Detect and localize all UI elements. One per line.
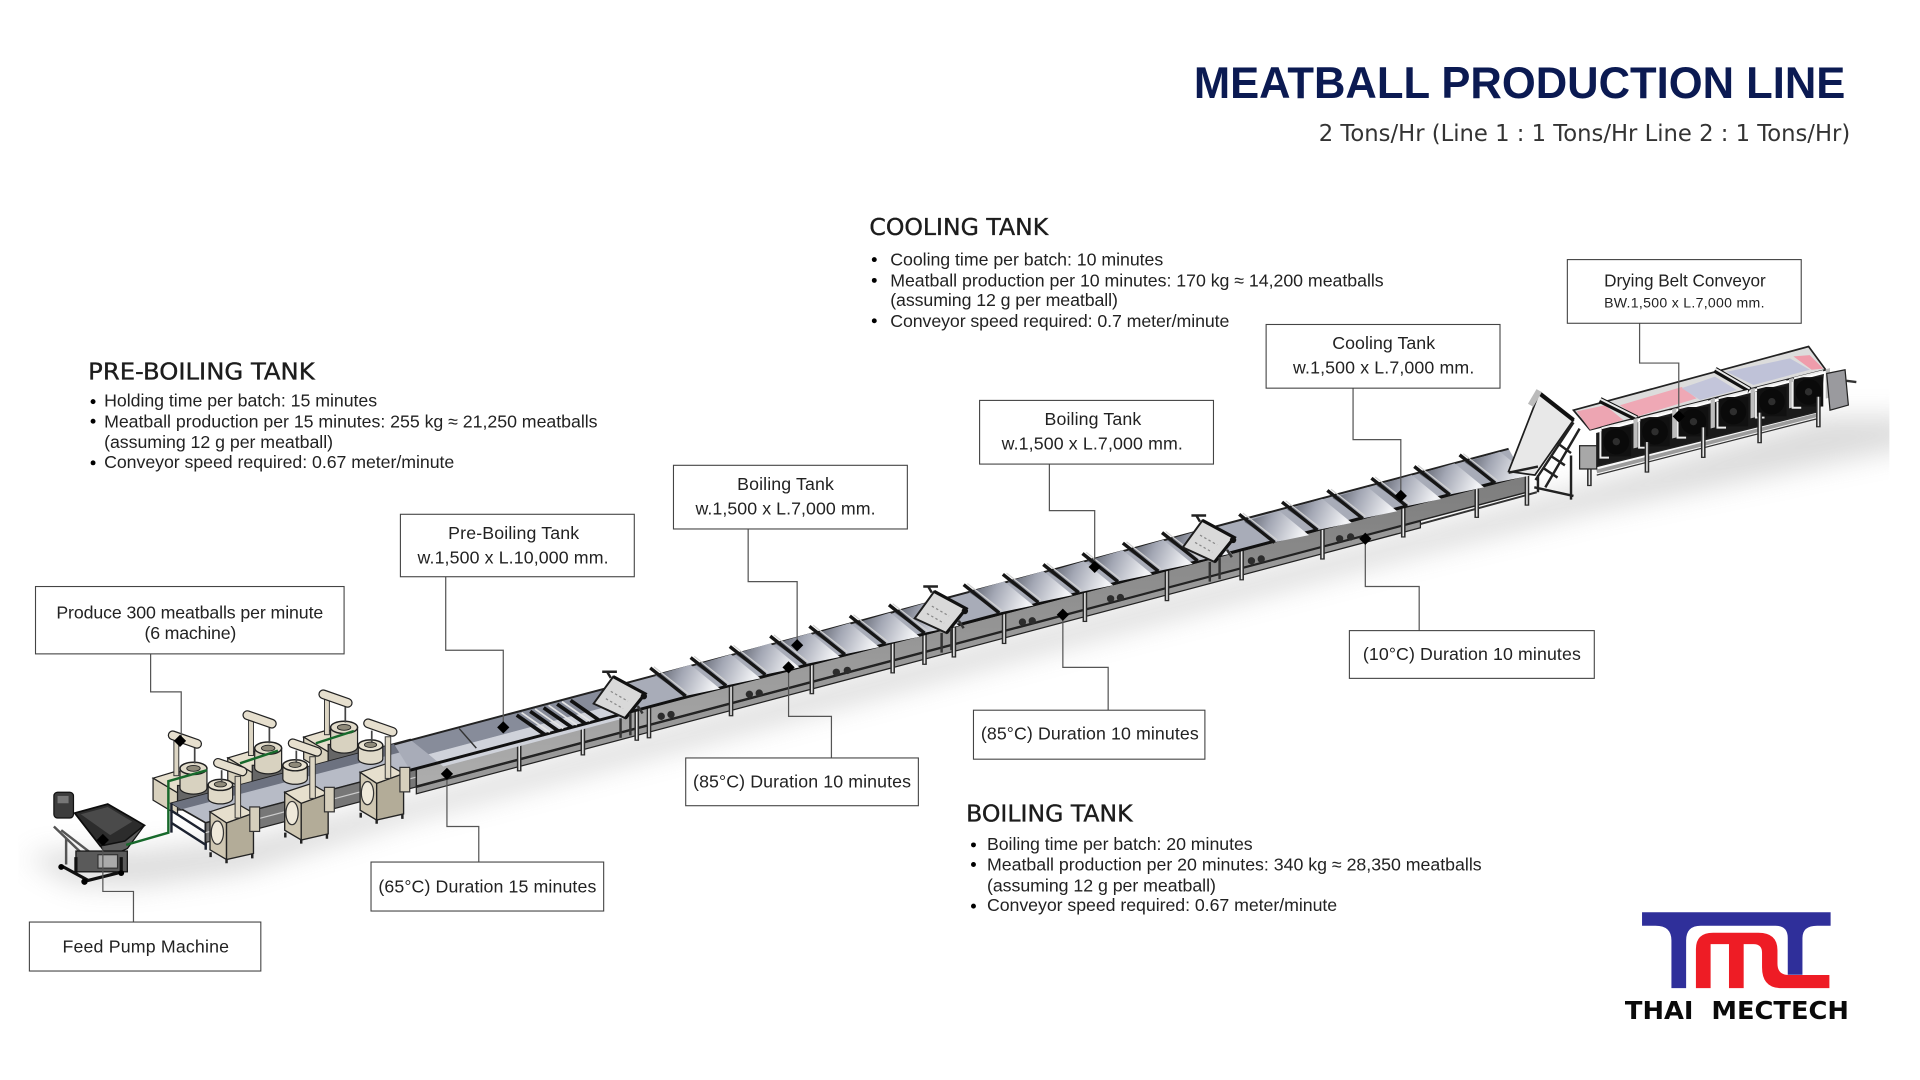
callout: pre-boiling tank size xyxy=(400,514,634,733)
panel: cooling tank xyxy=(869,214,1384,331)
floor shadow xyxy=(24,416,1910,887)
dryer body xyxy=(1573,347,1856,486)
inclined transfer conveyor xyxy=(1509,391,1580,500)
conveyor legs xyxy=(519,475,1527,771)
pre-boiling rung grid xyxy=(517,700,599,735)
callout: pre-boiling temperature: (65°C) Duration 15 minutes xyxy=(378,877,596,897)
callout: forming machines xyxy=(36,587,344,747)
panel: pre-boiling tank: (assuming 12 g per meatball) xyxy=(104,432,333,452)
panel: pre-boiling tank: Holding time per batch: 15 minutes xyxy=(104,391,377,411)
callout: boiling tank size 1: w.1,500 x L.7,000 mm. xyxy=(695,498,876,518)
callout: feed pump machine xyxy=(29,834,261,971)
callout: pre-boiling tank size: w.1,500 x L.10,000 mm. xyxy=(417,547,609,567)
panel: pre-boiling tank xyxy=(88,359,598,472)
panel: cooling tank: Cooling time per batch: 10 minutes xyxy=(890,250,1163,270)
boiling tank crossbars xyxy=(650,602,959,696)
callout: boiling temperature 2 xyxy=(973,609,1205,759)
back row forming machines xyxy=(153,694,360,815)
callout: pre-boiling temperature xyxy=(371,768,604,911)
panel: pre-boiling tank: Meatball production per 15 minutes: 255 kg ≈ 21,250 meatballs xyxy=(104,411,598,431)
drain valves xyxy=(658,533,1354,720)
callout: forming machines: Produce 300 meatballs per minute xyxy=(56,602,323,622)
callout: drying belt conveyor xyxy=(1567,260,1801,422)
conveyor side frame xyxy=(416,475,1537,794)
callout: boiling tank size 1 xyxy=(673,465,907,651)
second boiling tank crossbars xyxy=(964,529,1232,613)
callout: cooling tank size xyxy=(1266,324,1500,502)
callout: boiling temperature 2: (85°C) Duration 10 minutes xyxy=(981,724,1199,744)
panel: boiling tank: Boiling time per batch: 20 minutes xyxy=(987,834,1253,854)
callout: drying belt conveyor: Drying Belt Conveyor xyxy=(1604,271,1766,291)
transfer hoppers xyxy=(594,516,1236,738)
panel: boiling tank: Meatball production per 20 minutes: 340 kg ≈ 28,350 meatballs xyxy=(987,855,1482,875)
panel: cooling tank: Meatball production per 10 minutes: 170 kg ≈ 14,200 meatballs xyxy=(890,271,1384,291)
callout: boiling temperature 1 xyxy=(686,661,918,806)
callout: cooling temperature: (10°C) Duration 10 minutes xyxy=(1363,644,1581,664)
belt surface xyxy=(394,449,1523,770)
panel: boiling tank: Conveyor speed required: 0.67 meter/minute xyxy=(987,895,1337,915)
callout: boiling tank size 2: w.1,500 x L.7,000 mm. xyxy=(1001,433,1183,453)
production line machine xyxy=(54,347,1856,885)
conveyor under forming machines xyxy=(171,740,429,850)
front row forming machines xyxy=(208,723,410,863)
subtitle: 2 Tons/Hr (Line 1 : 1 Tons/Hr Line 2 : 1 Tons/Hr) xyxy=(1319,120,1850,147)
callout: drying belt conveyor: BW.1,500 x L.7,000 mm. xyxy=(1604,294,1764,310)
callout: cooling tank size: Cooling Tank xyxy=(1332,333,1435,353)
panel: boiling tank: (assuming 12 g per meatball) xyxy=(987,875,1216,895)
callout: forming machines: (6 machine) xyxy=(144,623,236,643)
panel: boiling tank xyxy=(966,801,1482,915)
logo: Thai Mectech: THAI MECTECH xyxy=(1625,996,1849,1025)
callout: pre-boiling tank size: Pre-Boiling Tank xyxy=(448,523,579,543)
callout: boiling tank size 2 xyxy=(980,400,1213,573)
feed pump machine xyxy=(54,792,144,885)
panel: cooling tank: Conveyor speed required: 0.7 meter/minute xyxy=(890,311,1230,331)
callout: cooling tank size: w.1,500 x L.7,000 mm. xyxy=(1292,357,1474,377)
callout: boiling tank size 2: Boiling Tank xyxy=(1044,409,1141,429)
logo: Thai Mectech xyxy=(1625,912,1849,1025)
panel: pre-boiling tank: PRE-BOILING TANK xyxy=(88,359,315,386)
callout: cooling temperature xyxy=(1349,533,1594,678)
panel: cooling tank: COOLING TANK xyxy=(869,214,1049,241)
panel: pre-boiling tank: Conveyor speed required: 0.67 meter/minute xyxy=(104,452,454,472)
green feed pipes xyxy=(126,731,354,845)
callout: boiling tank size 1: Boiling Tank xyxy=(737,474,834,494)
callout: boiling temperature 1: (85°C) Duration 10 minutes xyxy=(693,771,911,791)
panel: cooling tank: (assuming 12 g per meatball) xyxy=(890,290,1118,310)
panel: boiling tank: BOILING TANK xyxy=(966,801,1133,828)
cooling tank crossbars xyxy=(1239,452,1529,542)
callout: feed pump machine: Feed Pump Machine xyxy=(62,937,229,957)
title: MEATBALL PRODUCTION LINE xyxy=(1194,59,1845,108)
